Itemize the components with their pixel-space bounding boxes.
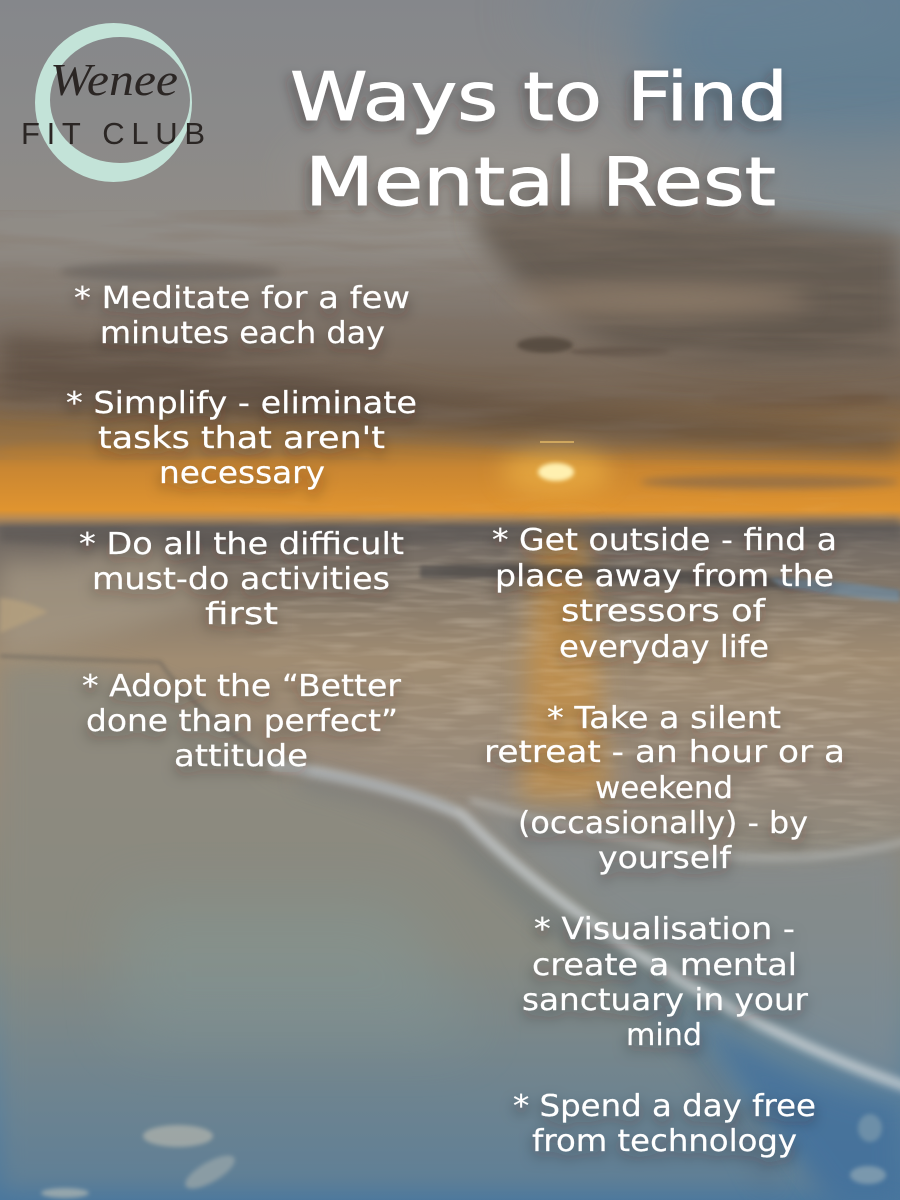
sea: dark wave bands [0,518,900,548]
tip: difficult first: * Do all the difficult [79,527,404,562]
water: blue lower right [690,1010,900,1200]
tip: better done [82,669,402,774]
tip: simplify: * Simplify - eliminate [66,386,417,421]
tip: difficult first: first [205,597,278,632]
sun [501,450,611,494]
tip: get outside: stressors of [561,594,767,629]
sea: texture [258,541,900,832]
title: Mental Rest [305,143,776,221]
tip: simplify: tasks that aren't [98,421,385,456]
sky: blue top right [640,0,900,150]
sea: sun reflection [520,525,610,800]
tip: silent retreat: (occasionally) - by [518,806,808,841]
tip: meditate: * Meditate for a few [74,281,410,316]
logo script name: Wenee [50,54,178,105]
tip: technology free: * Spend a day free [513,1089,816,1124]
tip: technology free: from technology [532,1124,797,1159]
tip: get outside: everyday life [559,630,769,665]
tip: better done: done than perfect” [86,704,398,739]
tip: silent retreat: * Take a silent [547,701,781,736]
tip: get outside: * Get outside - find a [492,523,837,558]
foam: shoreline wave [0,656,455,810]
sky: dark clouds [470,208,900,361]
tip: get outside: place away from the [495,559,834,594]
tip: visualisation: sanctuary in your [522,983,809,1018]
right column tips [484,523,845,1159]
tip: silent retreat: weekend [595,771,733,806]
tip: difficult first [79,527,404,632]
tip: visualisation: mind [626,1018,702,1053]
tip: visualisation: * Visualisation - [534,912,795,947]
left column tips [66,281,417,774]
tip: technology free [513,1089,816,1159]
pebbles [143,1125,213,1147]
tip: silent retreat: retreat - an hour or a [484,735,845,770]
title: Ways to Find [290,58,788,136]
title [290,58,788,221]
logo ring [35,23,192,182]
tip: difficult first: must-do activities [92,562,390,597]
tip: silent retreat [484,701,845,876]
right: grey-blue wash beyond shore [460,800,900,1085]
tip: get outside [492,523,837,665]
sand: smooth left foreground [0,663,840,1190]
tip: simplify: necessary [159,456,325,491]
tip: visualisation: create a mental [532,948,797,983]
tip: better done: * Adopt the “Better [82,669,402,704]
tip: better done: attitude [174,739,308,774]
logo: Wenee Fit Club [21,23,205,182]
tip: simplify [66,386,417,491]
tip: visualisation [522,912,809,1053]
tip: meditate [74,281,410,351]
tip: silent retreat: yourself [598,841,733,876]
logo subtitle: FIT CLUB [21,116,205,151]
tip: meditate: minutes each day [100,316,385,351]
